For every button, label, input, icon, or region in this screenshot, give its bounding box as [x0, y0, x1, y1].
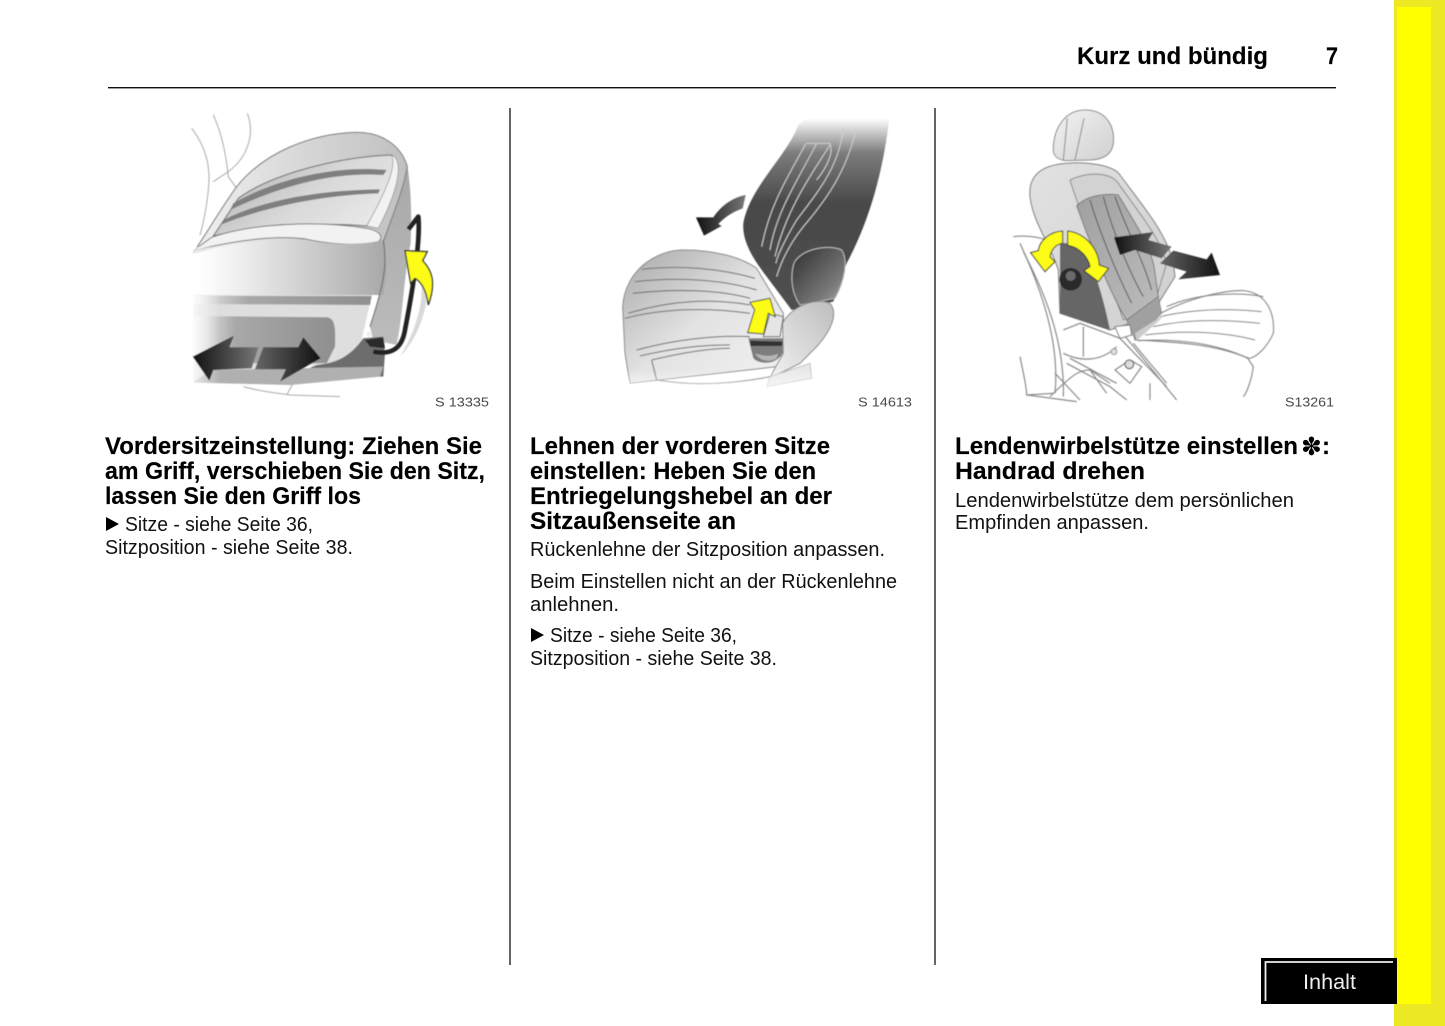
column 2 heading: Sitzaußenseite an: [530, 508, 736, 535]
illustration: lumbar support: [1013, 110, 1334, 410]
cushion side: [370, 165, 411, 345]
seat cushion: [623, 250, 783, 383]
column 1 text: [105, 433, 485, 559]
illustration: seat slide adjustment: [183, 113, 489, 410]
white front band: [193, 224, 381, 251]
column 2 body: Beim Einstellen nicht an der Rückenlehne: [530, 571, 897, 593]
column 1 heading: lassen Sie den Griff los: [105, 483, 361, 510]
column 3 body: Lendenwirbelstütze dem persönlichen: [955, 490, 1294, 512]
column 2 body: Sitze - siehe Seite 36,: [550, 625, 737, 647]
column 1 body: [105, 514, 353, 559]
column 3 text: [955, 432, 1330, 534]
dark base: [293, 337, 385, 377]
yellow arrow: [748, 298, 775, 334]
column 2 body: Rückenlehne der Sitzposition anpassen.: [530, 539, 885, 561]
cushion top: [193, 132, 407, 253]
button: Inhalt: [1261, 958, 1397, 1004]
plinth: [193, 295, 372, 383]
illustration: backrest release: [617, 118, 912, 410]
button: Inhalt: Inhalt: [1303, 971, 1356, 994]
backrest outline lines: [192, 113, 340, 397]
page header: Kurz und bündig: [1077, 43, 1268, 70]
bolster: [792, 247, 845, 305]
column 1 body: Sitze - siehe Seite 36,: [125, 514, 313, 536]
left fade: [183, 247, 220, 387]
column 2 heading: Entriegelungshebel an der: [530, 483, 832, 510]
column 3 heading: [955, 432, 1330, 485]
backrest: [1030, 163, 1175, 330]
backrest: [743, 118, 889, 310]
page header: 7: [1326, 43, 1338, 70]
yellow arrow: [405, 251, 433, 305]
hinge cover: [770, 301, 834, 378]
yellow dial arrows: [1031, 231, 1063, 272]
image code: S 13335: [435, 394, 489, 410]
shadow of side: [400, 247, 428, 357]
black handle: [373, 217, 419, 353]
column 1 heading: am Griff, verschieben Sie den Sitz,: [105, 458, 485, 485]
column 3 heading: Handrad drehen: [955, 458, 1145, 485]
fore-aft arrow: [193, 336, 258, 381]
yellow side band: [1394, 0, 1445, 1026]
image code: S 14613: [858, 394, 912, 410]
column 2 heading: Lehnen der vorderen Sitze: [530, 433, 830, 460]
column 2 body: Sitzposition - siehe Seite 38.: [530, 648, 777, 670]
column 1 heading: [105, 433, 485, 510]
column 2 heading: [530, 433, 832, 535]
column 3 heading: :: [1322, 433, 1330, 460]
headrest: [1053, 110, 1114, 161]
curved dark arrow: [696, 195, 746, 236]
forward-back arrows: [1114, 232, 1172, 258]
column 1 body: Sitzposition - siehe Seite 38.: [105, 537, 353, 559]
cushion front: [193, 239, 387, 295]
column 2 heading: einstellen: Heben Sie den: [530, 458, 816, 485]
seat outline: [1133, 291, 1274, 358]
knob: [1059, 268, 1082, 291]
image code: S13261: [1285, 394, 1334, 410]
column 3 body: Empfinden anpassen.: [955, 512, 1149, 534]
column 2 body: [530, 539, 897, 670]
column 2 text: [530, 433, 897, 670]
lever pocket: [748, 338, 784, 363]
column 1 heading: Vordersitzeinstellung: Ziehen Sie: [105, 433, 482, 460]
column 3 heading: Lendenwirbelstütze einstellen: [955, 433, 1298, 460]
side dark panel: [1060, 243, 1110, 330]
lumbar panel: [1077, 194, 1158, 320]
bottom fade: [617, 370, 823, 397]
column 3 body: [955, 490, 1294, 534]
console: [1013, 236, 1177, 402]
column 3 heading: ✽: [1301, 432, 1322, 461]
column 2 body: anlehnen.: [530, 594, 619, 616]
